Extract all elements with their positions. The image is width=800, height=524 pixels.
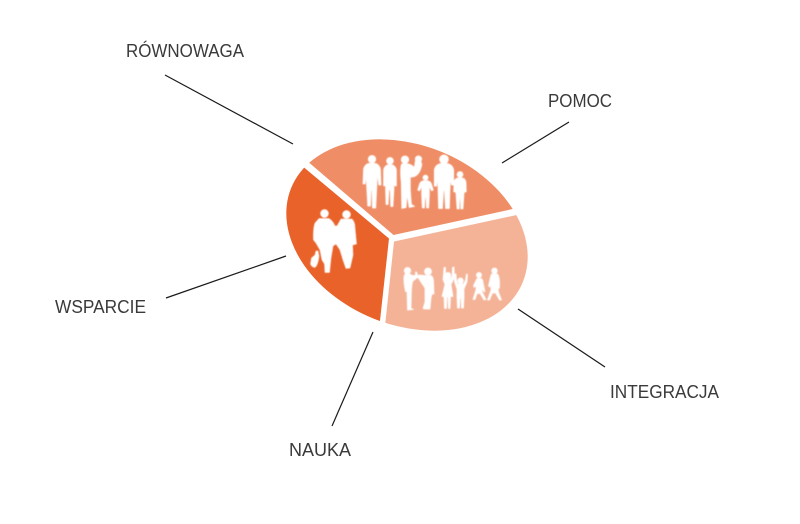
slice: top (pomoc): [309, 139, 513, 235]
pie chart: [286, 139, 528, 331]
infographic diagram: [55, 40, 719, 456]
slice: right (integracja): [385, 215, 528, 331]
leader line: równowaga: [165, 75, 293, 144]
leader line: nauka: [332, 332, 373, 426]
label: wsparcie: WSPARCIE: [55, 297, 146, 317]
icon: family silhouettes: [363, 155, 466, 209]
leader line: wsparcie: [166, 256, 286, 298]
slice: left (wsparcie): [286, 168, 389, 321]
label: równowaga: RÓWNOWAGA: [126, 40, 244, 61]
leader line: integracja: [518, 309, 605, 367]
label: nauka: NAUKA: [289, 440, 351, 460]
label: pomoc: POMOC: [548, 91, 612, 111]
leader line: pomoc: [502, 122, 569, 163]
icon: couple silhouettes: [310, 210, 356, 272]
label: integracja: INTEGRACJA: [610, 382, 719, 402]
icon: children silhouettes: [404, 267, 502, 310]
